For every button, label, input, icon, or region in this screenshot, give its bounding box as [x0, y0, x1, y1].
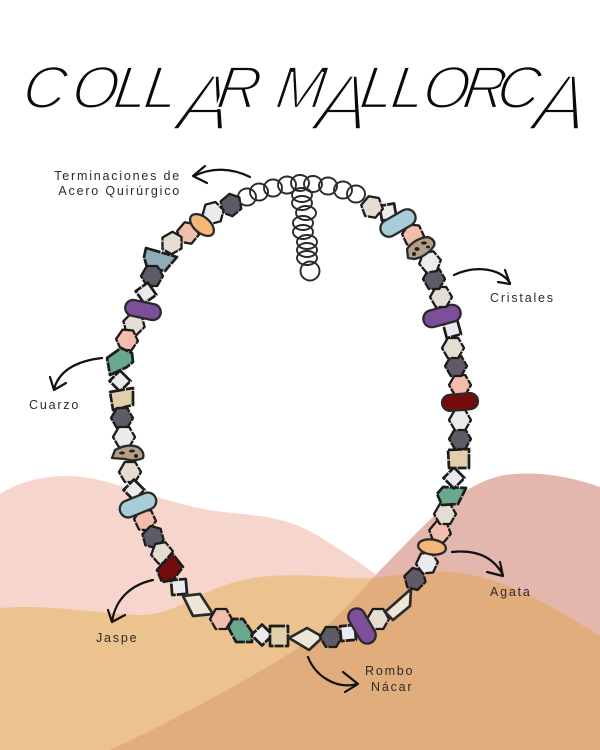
bead: dark	[402, 566, 428, 592]
bead: orange agate	[417, 538, 447, 556]
title: R	[213, 53, 266, 121]
bead: dark	[320, 627, 342, 647]
bead: light	[415, 552, 439, 574]
bead: small light diamond	[252, 624, 272, 646]
title: L	[140, 53, 183, 121]
bead: leopard stone	[407, 237, 434, 259]
bead: cream	[442, 338, 464, 358]
necklace beads	[107, 192, 479, 650]
bead: light	[113, 427, 135, 447]
bead: orange agate	[186, 210, 218, 240]
label: cristales: Cristales	[490, 291, 555, 305]
bead: cream	[367, 609, 389, 629]
bead: light	[417, 250, 443, 274]
bead: cream	[430, 287, 452, 307]
bead: light-blue stone	[377, 206, 419, 240]
bead: red jasper	[441, 392, 479, 412]
bead: small light	[373, 197, 403, 227]
arrow: agata	[452, 552, 503, 576]
background: orange hill	[0, 571, 600, 750]
background: dusty pink hill	[110, 473, 600, 750]
bead: small light diamond	[124, 480, 144, 500]
bead: pink	[401, 224, 425, 246]
bead: purple quartz	[345, 605, 379, 647]
bead: cream	[157, 229, 187, 257]
bead: dark	[423, 269, 445, 289]
title: A	[524, 58, 594, 148]
title: C	[493, 53, 546, 121]
title: L	[110, 53, 153, 121]
bead: nacre rhombus bottom	[289, 628, 323, 650]
bead: light	[200, 200, 226, 226]
bead: blue-grey stone	[144, 248, 177, 271]
bead: dark	[111, 408, 133, 428]
label: cuarzo: Cuarzo	[29, 398, 80, 412]
arrow: jaspe	[108, 580, 153, 622]
bead: green quartz	[107, 348, 133, 375]
bead: dark	[217, 192, 245, 218]
bead: pink	[210, 609, 232, 629]
bead: cream	[359, 195, 385, 219]
bead: tan square	[448, 449, 469, 468]
label: rombo: Rombo	[365, 664, 414, 678]
arrow: terminaciones	[193, 166, 250, 183]
bead: cream	[149, 541, 175, 565]
bead: red jasper	[157, 553, 183, 582]
title: L	[356, 53, 399, 121]
bead: dark	[141, 266, 163, 286]
title: O	[68, 53, 124, 121]
title: M	[272, 53, 332, 121]
bead: dark	[449, 429, 471, 449]
bead: purple quartz	[124, 298, 162, 322]
arrow: cuarzo	[50, 358, 102, 390]
bead: purple quartz	[421, 303, 463, 329]
bead: nacre rhombus left	[183, 594, 213, 616]
title: O	[419, 53, 475, 121]
title	[15, 53, 595, 148]
clasp chain: hanging rings	[292, 188, 320, 280]
bead: nacre rhombus right	[385, 589, 411, 620]
bead: pink	[449, 375, 471, 395]
bead: small light	[134, 281, 158, 305]
title: A	[306, 58, 376, 148]
label: agata: Agata	[490, 585, 532, 599]
title: L	[387, 53, 430, 121]
bead: small light diamond	[110, 370, 130, 392]
bead: small light	[164, 572, 194, 602]
label: terminaciones: Terminaciones de	[54, 169, 181, 183]
bead: pink	[175, 221, 201, 245]
bead: small light	[438, 315, 466, 343]
bead: dark	[445, 356, 467, 376]
bead: pink	[115, 329, 139, 351]
arrow: rombo nacar	[308, 657, 358, 692]
bead: cream	[434, 504, 456, 524]
bead: cream	[121, 311, 147, 337]
bead: small light	[333, 618, 363, 648]
label: acero quirurgico: Acero Quirúrgico	[58, 184, 181, 198]
title: C	[19, 53, 72, 121]
clasp chain: top rings	[238, 175, 365, 206]
bead: green quartz	[437, 487, 466, 505]
bead: light-blue stone	[117, 490, 159, 520]
bead: pink	[133, 509, 157, 531]
arrow: cristales	[454, 269, 510, 284]
label: nacar: Nácar	[371, 680, 413, 694]
bead: light	[449, 410, 471, 430]
background: light pink hill	[0, 476, 385, 750]
background: hill overlap	[110, 571, 600, 750]
bead: tan square	[270, 626, 288, 646]
bead: green quartz	[228, 619, 252, 642]
bead: tan square	[110, 388, 133, 410]
bead: small light diamond	[444, 468, 464, 488]
label: jaspe: Jaspe	[96, 631, 138, 645]
title: R	[459, 53, 512, 121]
bead: cream	[119, 462, 141, 482]
bead: pink	[427, 520, 453, 544]
bead: dark	[140, 524, 166, 550]
bead: leopard stone	[112, 446, 143, 460]
title: A	[168, 58, 238, 148]
